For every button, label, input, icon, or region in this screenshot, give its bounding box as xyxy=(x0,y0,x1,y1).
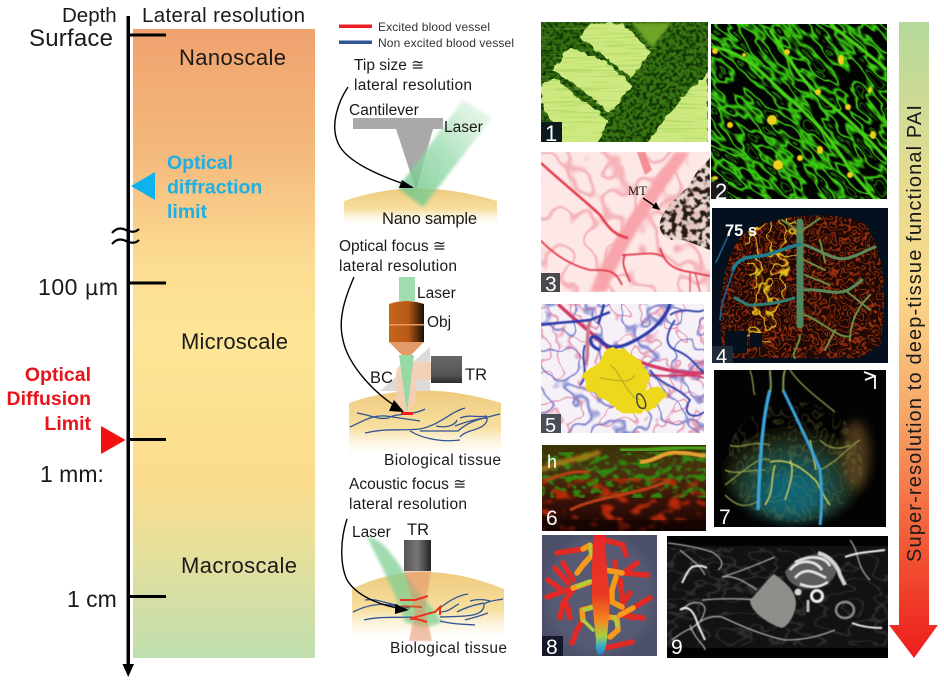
image 1: nanoscale scan xyxy=(541,22,708,146)
excited vessels xyxy=(400,596,440,622)
acoustic beam xyxy=(404,571,432,641)
arrow to focus xyxy=(342,519,406,609)
teal veins xyxy=(716,225,800,320)
number label 3 xyxy=(541,273,560,292)
organ cluster xyxy=(750,553,854,628)
diagram: photoacoustic nanoscopy: Laser xyxy=(444,119,483,136)
column heading: lateral resolution: Lateral resolution xyxy=(142,4,305,27)
green veins xyxy=(782,218,875,358)
number label 4 xyxy=(712,346,733,363)
diagram: optical resolution microscopy: Obj xyxy=(427,314,451,331)
diagram: acoustic resolution microscopy: Acoustic focus ≅ xyxy=(349,476,466,493)
legend: blood vessels xyxy=(339,20,514,50)
image 3: pink vessel map with tumour xyxy=(540,152,710,296)
depth axis with arrow xyxy=(122,16,166,677)
diagram: optical resolution microscopy xyxy=(339,238,501,469)
arrow: super-resolution to deep-tissue functional PAI xyxy=(889,22,938,658)
dark cell cluster xyxy=(660,158,710,250)
image 4: cortex vessel map 75 s xyxy=(712,208,888,368)
yellow hot spots xyxy=(712,48,876,180)
column heading: depth: Depth xyxy=(62,4,117,27)
diagram: photoacoustic nanoscopy: Cantilever xyxy=(349,102,419,119)
tissue xyxy=(349,390,501,458)
marker: optical diffusion limit xyxy=(101,426,126,454)
wide vessel band xyxy=(590,152,690,292)
scale label: microscale: Microscale xyxy=(181,329,288,354)
image 5: red and blue vessels with yellow tumour xyxy=(541,304,704,437)
image 9: grayscale whole-body vessel map xyxy=(667,536,888,659)
prism beam combiner xyxy=(380,347,430,391)
diagram: photoacoustic nanoscopy: Tip size ≅ xyxy=(354,57,424,74)
red vasculature xyxy=(720,215,884,358)
side branches xyxy=(547,540,650,648)
laser beam xyxy=(367,536,442,626)
diagram: acoustic resolution microscopy: Laser xyxy=(352,524,391,541)
number label 1: 1 xyxy=(545,121,557,146)
number label 2 xyxy=(711,182,728,199)
number label 3: 3 xyxy=(545,273,557,296)
diagram: optical resolution microscopy: TR xyxy=(465,366,487,384)
depth label: 1 mm: 1 mm: xyxy=(40,461,104,487)
number label 9: 9 xyxy=(671,636,683,659)
label: optical diffusion limit: Limit xyxy=(44,413,91,435)
axis break symbol xyxy=(112,229,139,244)
diagram: optical resolution microscopy: Biological tissue xyxy=(384,452,501,469)
diagram: optical resolution microscopy: lateral resolution xyxy=(339,258,457,275)
number label 4: 4 xyxy=(716,346,727,368)
image 7: teal vessel map xyxy=(714,370,886,529)
depth label: 100 micrometres: 100 µm xyxy=(38,274,118,300)
label: optical diffraction limit: diffraction xyxy=(167,176,262,198)
arrow to focus xyxy=(341,277,402,410)
diagram: acoustic resolution microscopy: lateral resolution xyxy=(349,496,467,513)
diagram: photoacoustic nanoscopy xyxy=(335,57,497,228)
focused beam xyxy=(399,355,414,413)
number label 6: 6 xyxy=(546,507,558,530)
laser beam xyxy=(398,100,492,207)
tissue xyxy=(352,572,504,641)
image 6: cross-section with green and red signals xyxy=(542,445,706,531)
light patches xyxy=(541,23,708,143)
dark diagonal band xyxy=(598,22,708,142)
number label 2: 2 xyxy=(715,179,727,204)
label: optical diffusion limit: Diffusion xyxy=(7,388,91,410)
arrow caption: Super-resolution to deep-tissue functional PAI xyxy=(904,105,926,562)
yellow tumour xyxy=(584,348,665,413)
image 8: vessel map with rainbow coding xyxy=(542,535,657,659)
label: optical diffusion limit: Optical xyxy=(25,364,91,386)
time label: 75 s xyxy=(725,222,757,240)
annotation MT: MT xyxy=(628,184,647,198)
label: optical diffraction limit: Optical xyxy=(167,152,233,174)
number label 7: 7 xyxy=(719,506,731,529)
number label 5: 5 xyxy=(545,415,556,437)
number label 8: 8 xyxy=(546,636,558,659)
blood vessels xyxy=(350,408,500,441)
acoustic path xyxy=(396,362,431,414)
scale label: nanoscale: Nanoscale xyxy=(179,45,286,70)
letter h: h xyxy=(547,452,557,472)
marker: optical diffraction limit xyxy=(131,172,155,200)
diagram: acoustic resolution microscopy xyxy=(342,476,507,657)
image 2: green vessel map xyxy=(711,24,887,199)
scale label: macroscale: Macroscale xyxy=(181,553,297,578)
depth label: surface: Surface xyxy=(29,25,113,52)
orientation mark xyxy=(864,372,875,389)
depth label: 1 cm: 1 cm xyxy=(67,586,117,612)
excited vessel xyxy=(401,412,413,415)
diagram: optical resolution microscopy: Laser xyxy=(417,285,456,302)
diagram: acoustic resolution microscopy: Biological tissue xyxy=(390,640,507,657)
transducer xyxy=(404,540,431,571)
arrow to tip xyxy=(335,87,412,187)
diagram: acoustic resolution microscopy: TR xyxy=(407,521,429,539)
diagram: optical resolution microscopy: BC xyxy=(370,369,393,387)
diagram: optical resolution microscopy: Optical focus ≅ xyxy=(339,238,446,255)
objective lens xyxy=(389,301,424,355)
central vessel xyxy=(592,535,610,655)
panel: depth and lateral resolution scale xyxy=(7,4,315,677)
legend: blood vessels: Excited blood vessel xyxy=(378,20,490,34)
laser in xyxy=(399,277,415,301)
nano sample xyxy=(344,188,497,226)
legend: blood vessels: Non excited blood vessel xyxy=(378,36,514,50)
cantilever xyxy=(353,118,443,190)
blood vessels xyxy=(353,594,503,625)
annotation MT xyxy=(628,184,660,210)
number label 1 xyxy=(541,122,562,142)
diagram: photoacoustic nanoscopy: Nano sample xyxy=(382,210,477,228)
label: optical diffraction limit: limit xyxy=(167,201,208,223)
diagram: photoacoustic nanoscopy: lateral resolution xyxy=(354,77,472,94)
number label 5 xyxy=(541,414,561,433)
gradient resolution band xyxy=(133,29,315,658)
transducer xyxy=(431,356,462,383)
